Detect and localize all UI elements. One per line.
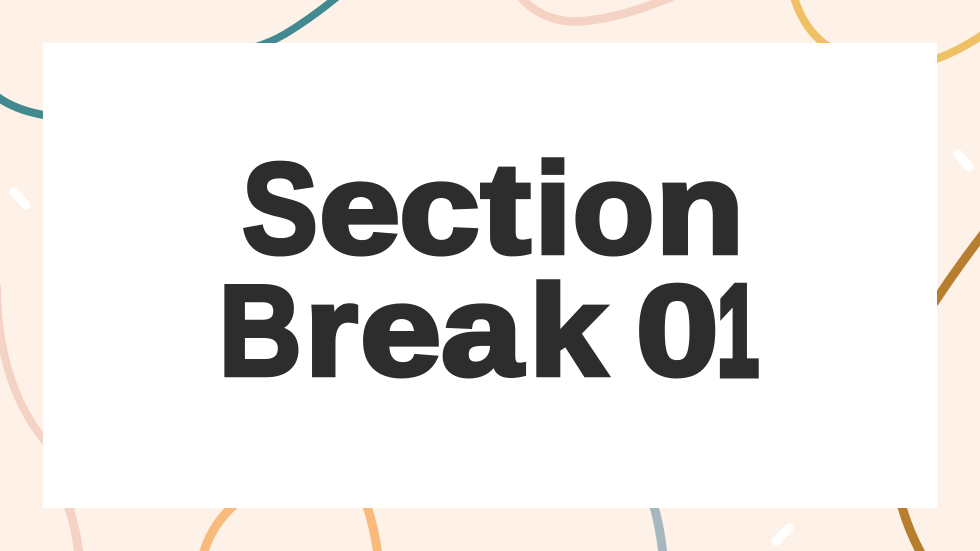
title line 2: k [529,259,607,403]
title line 1: S [242,137,318,281]
title line 2: 1 [717,259,759,403]
title line 2: 0 [636,259,719,403]
title line 1: n [655,137,744,281]
title line 1: c [399,137,480,281]
title line 1: i [534,137,572,281]
title line 2: B [219,259,302,403]
panel: white card [43,43,937,508]
title line 1: e [319,137,400,281]
title line 1: t [481,137,531,281]
title line 2: e [360,259,441,403]
title line 2: r [305,259,358,403]
title line 1: o [572,137,654,281]
title line 2: a [441,259,524,403]
